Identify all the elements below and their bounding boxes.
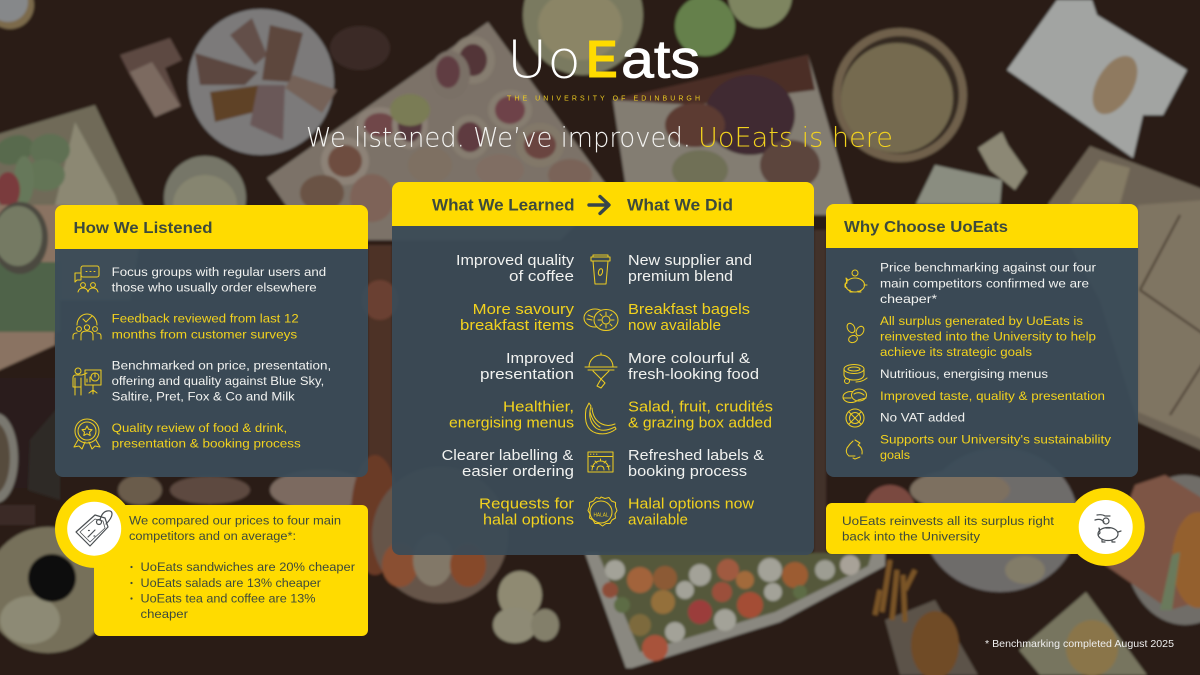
icon: price tag: [76, 511, 112, 546]
icon: sustainability: [846, 440, 862, 459]
callout box: [94, 505, 368, 636]
row: healthier: [449, 398, 773, 434]
row: halal: halal options: [483, 512, 574, 528]
top-left snacks: [120, 38, 182, 117]
icon: no VAT: [846, 409, 864, 427]
text: reinvest: [842, 514, 1055, 544]
panel header: [55, 205, 368, 249]
jar and breadsticks: [885, 600, 978, 675]
row: breakfast: [460, 301, 750, 334]
cheese, bottle: [978, 132, 1027, 190]
heading: Why Choose UoEats: Why Choose UoEats: [844, 219, 1008, 236]
text: comparison intro: competitors and on average*:: [129, 529, 296, 543]
footnote: * Benchmarking completed August 2025: [985, 638, 1174, 650]
row: coffee: [456, 252, 752, 285]
text: comparison intro: [129, 513, 341, 543]
list: savings: cheaper: [140, 607, 188, 621]
icon: cloche: [585, 353, 617, 388]
row: presentation: More colourful &: [628, 350, 750, 367]
bottom tray: [585, 553, 885, 668]
row: breakfast: breakfast items: [460, 317, 574, 334]
text: comparison intro: We compared our prices to four main: [129, 513, 341, 527]
text: no VAT: No VAT added: [880, 411, 965, 425]
text: surplus: All surplus generated by UoEats is: [880, 314, 1083, 328]
row: labelling: Clearer labelling &: [442, 447, 573, 464]
heading: What We Did: What We Did: [627, 196, 733, 215]
icon: coffee cup: [591, 255, 610, 284]
text: surplus: reinvested into the University to help: [880, 330, 1096, 344]
heading: How We Listened: How We Listened: [74, 220, 212, 237]
centre-left bottom food: [351, 455, 399, 575]
row: breakfast: now available: [628, 317, 721, 334]
row: labelling: [442, 447, 764, 480]
callout badge: [1067, 488, 1145, 566]
icon: bagels: [584, 309, 618, 330]
text: sustainability: Supports our University's sustainability: [880, 432, 1112, 446]
title: UoEats is here: [698, 122, 893, 154]
icon: halal badge: [588, 497, 617, 526]
row: labelling: Refreshed labels &: [628, 447, 764, 464]
right bottom plate: [922, 448, 1078, 592]
row: presentation: Improved: [506, 350, 574, 367]
row: halal: Requests for: [479, 496, 574, 512]
text: quality review: presentation & booking process: [112, 436, 301, 450]
logo: UoEats: [507, 30, 700, 102]
list: savings: [130, 560, 355, 621]
list: savings: UoEats sandwiches are 20% cheaper: [140, 560, 355, 574]
row: healthier: & grazing box added: [628, 414, 772, 432]
row: labelling: easier ordering: [462, 463, 574, 480]
row: presentation: [480, 350, 759, 388]
text: benchmarked: [112, 358, 331, 404]
logo: UoEats: E: [586, 30, 618, 90]
text: nutritious: Nutritious, energising menus: [880, 367, 1048, 381]
panel header: [826, 204, 1138, 248]
panel body: [392, 220, 814, 555]
list: savings: UoEats salads are 13% cheaper: [140, 576, 321, 590]
icon: food bowl: [844, 364, 867, 384]
logo tagline: THE UNIVERSITY OF EDINBURGH: [507, 96, 700, 102]
icon: piggy bank: [845, 270, 867, 292]
icon: halal badge: HALAL: [594, 512, 608, 518]
text: quality review: [112, 421, 301, 450]
icon: bagels stack: [843, 389, 866, 402]
callout box: [826, 503, 1096, 554]
row: presentation: presentation: [480, 366, 574, 383]
row: healthier: Healthier,: [503, 398, 574, 416]
callout: reinvest surplus: [826, 488, 1145, 566]
icon: coins: [845, 322, 866, 344]
text: benchmarked: Benchmarked on price, presentation,: [112, 358, 331, 372]
text: reinvest: back into the University: [842, 530, 981, 544]
row: coffee: of coffee: [509, 268, 574, 285]
row: labelling: booking process: [628, 463, 747, 480]
text: feedback: months from customer surveys: [112, 327, 297, 341]
gap left-centre: [368, 245, 392, 480]
title: [306, 122, 893, 154]
row: coffee: Improved quality: [456, 252, 575, 269]
wrap tray: [267, 22, 610, 240]
panel: Why Choose UoEats: [826, 204, 1138, 477]
panel: How We Listened: [55, 205, 368, 477]
left edge: bowl, beans, tan tray, wood: [0, 205, 60, 372]
text: price benchmarking: cheaper*: [880, 292, 937, 306]
text: focus groups: those who usually order elsewhere: [112, 280, 317, 294]
text: surplus: achieve its strategic goals: [880, 345, 1032, 359]
text: price benchmarking: main competitors confirmed we are: [880, 276, 1089, 290]
callout badge: [55, 490, 133, 568]
icon: quality award: [74, 419, 100, 449]
text: benchmarked: Saltire, Pret, Fox & Co and Milk: [112, 390, 296, 404]
row: healthier: energising menus: [449, 414, 574, 432]
row: coffee: New supplier and: [628, 252, 752, 269]
list: savings: UoEats tea and coffee are 13%: [140, 592, 316, 606]
callout: price comparison: [55, 490, 368, 636]
text: quality review: Quality review of food & drink,: [112, 421, 287, 435]
text: focus groups: [112, 265, 326, 294]
logo: UoEats: Uo: [507, 30, 581, 90]
panel header: [392, 182, 814, 226]
panel body: [55, 240, 368, 477]
heading: What We Learned: What We Learned: [432, 196, 574, 215]
text: price benchmarking: [880, 261, 1096, 306]
row: breakfast: More savoury: [473, 301, 575, 318]
arrow: [589, 196, 609, 214]
text: improved taste: Improved taste, quality & presentation: [880, 389, 1105, 403]
row: coffee: premium blend: [628, 268, 733, 285]
row: breakfast: Breakfast bagels: [628, 301, 750, 318]
text: focus groups: Focus groups with regular users and: [112, 265, 326, 279]
logo: UoEats: ats: [621, 30, 700, 90]
text: feedback: Feedback reviewed from last 12: [112, 312, 299, 326]
title: We listened. We’ve improved.: [306, 122, 691, 154]
icon: focus group: [75, 266, 99, 292]
icon: bananas: [585, 403, 616, 434]
icon: presenter at board: [73, 368, 101, 395]
panel body: [826, 240, 1138, 477]
bottom-left plate: [0, 527, 111, 653]
text: reinvest: UoEats reinvests all its surplus right: [842, 514, 1055, 528]
row: healthier: Salad, fruit, crudités: [628, 398, 773, 416]
row: halal: available: [628, 512, 688, 528]
text: feedback: [112, 312, 299, 341]
icon: feedback: [73, 314, 101, 340]
left tray: [0, 105, 145, 300]
text: surplus: [880, 314, 1096, 359]
crisp bowl: [833, 28, 967, 162]
right tray with sandwiches: [1048, 146, 1200, 452]
text: benchmarked: offering and quality against Blue Sky,: [112, 374, 324, 388]
bag bottom-right: [1019, 592, 1147, 675]
text: price benchmarking: Price benchmarking against our four: [880, 261, 1096, 275]
row: halal: [479, 496, 754, 528]
bowl, apple: [523, 0, 643, 75]
icon: browser settings: [588, 452, 613, 472]
row: halal: Halal options now: [628, 496, 754, 512]
panel: What We Learned / What We Did: [392, 182, 814, 555]
row: presentation: fresh-looking food: [628, 366, 759, 383]
icon: hand and piggy bank: [1095, 515, 1121, 542]
text: sustainability: goals: [880, 448, 910, 462]
text: sustainability: [880, 432, 1112, 462]
crisp bag: [1007, 0, 1187, 158]
grape tray: [613, 55, 855, 215]
